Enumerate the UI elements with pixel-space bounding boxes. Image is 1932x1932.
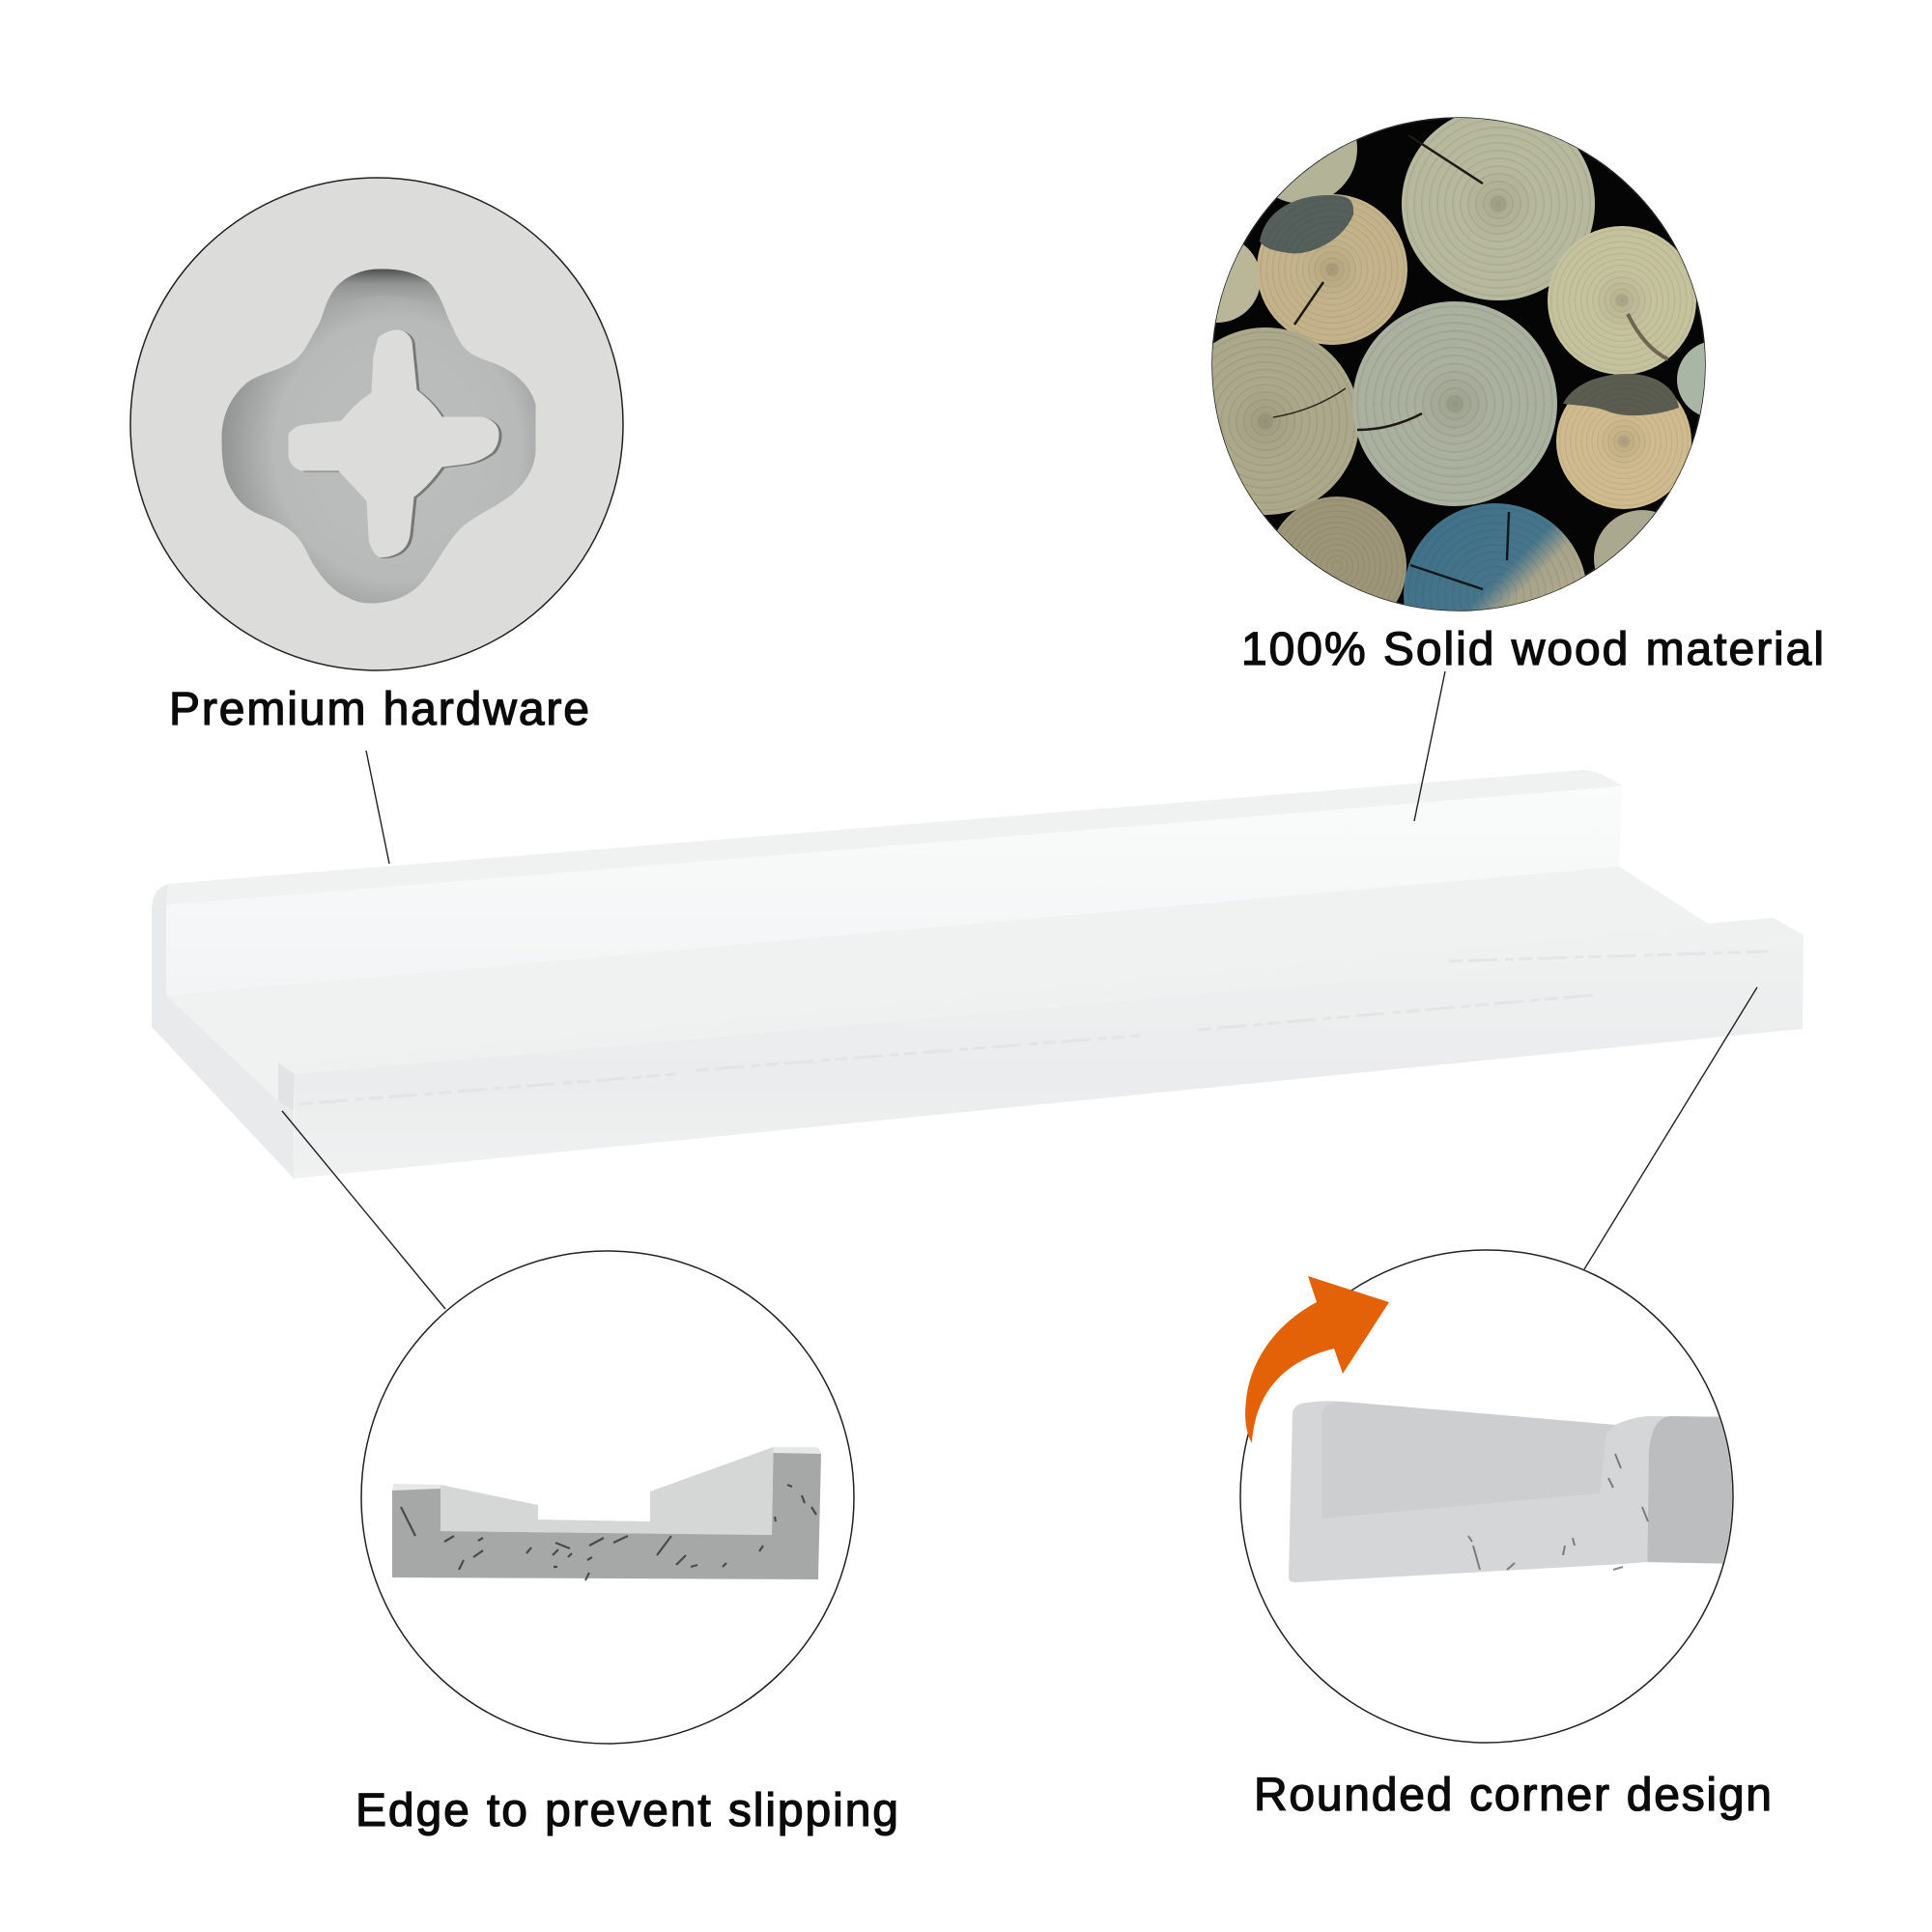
shelf left end bbox=[152, 884, 294, 1179]
screw recess bbox=[222, 269, 535, 603]
edge profile cut face bbox=[392, 1453, 821, 1579]
shelf lip top bbox=[278, 918, 1804, 1074]
edge profile right highlight bbox=[773, 1447, 821, 1455]
shelf back top bbox=[166, 770, 1622, 905]
rounded corner shelf piece bbox=[1289, 1401, 1739, 1582]
panel: solid wood detail bbox=[1211, 117, 1706, 611]
wood photo disc bbox=[1212, 118, 1705, 611]
wood logs bbox=[1212, 118, 1705, 611]
edge profile inner wall bbox=[440, 1447, 773, 1535]
shelf floor bbox=[166, 867, 1708, 1101]
screw head disc bbox=[130, 178, 623, 670]
edge circle bbox=[361, 1251, 854, 1744]
panel: shelf product bbox=[152, 770, 1804, 1179]
panel: edge detail bbox=[361, 1251, 854, 1744]
lip front grain bbox=[299, 952, 1768, 1104]
rounded corner circle bbox=[1240, 1250, 1733, 1743]
shelf piece speckles bbox=[1468, 1454, 1648, 1570]
shelf lip front bbox=[294, 935, 1804, 1179]
panel: premium hardware detail bbox=[130, 178, 623, 670]
shelf back face bbox=[166, 785, 1622, 995]
cross slot bbox=[288, 330, 498, 557]
shelf piece end face bbox=[1648, 1416, 1739, 1564]
label: solid wood material: 100% Solid wood material bbox=[1241, 624, 1824, 675]
cross slot shadow bbox=[292, 330, 502, 558]
shelf piece inner wall bbox=[1344, 1402, 1614, 1509]
edge profile speckles bbox=[401, 1485, 816, 1580]
lip left edge bbox=[278, 1063, 295, 1111]
infographic canvas bbox=[129, 117, 1822, 1836]
recess top shadow bbox=[321, 269, 444, 319]
edge profile left highlight bbox=[392, 1484, 440, 1492]
panel: rounded corner detail bbox=[1240, 1250, 1739, 1743]
leader lines bbox=[282, 671, 1757, 1309]
label: edge to prevent slipping: Edge to prevent slipping bbox=[355, 1785, 898, 1836]
label: premium hardware: Premium hardware bbox=[169, 684, 589, 735]
icon: orange arrow bbox=[1245, 1276, 1389, 1443]
label: rounded corner design: Rounded corner design bbox=[1254, 1770, 1772, 1821]
shelf piece body bbox=[1289, 1401, 1739, 1582]
